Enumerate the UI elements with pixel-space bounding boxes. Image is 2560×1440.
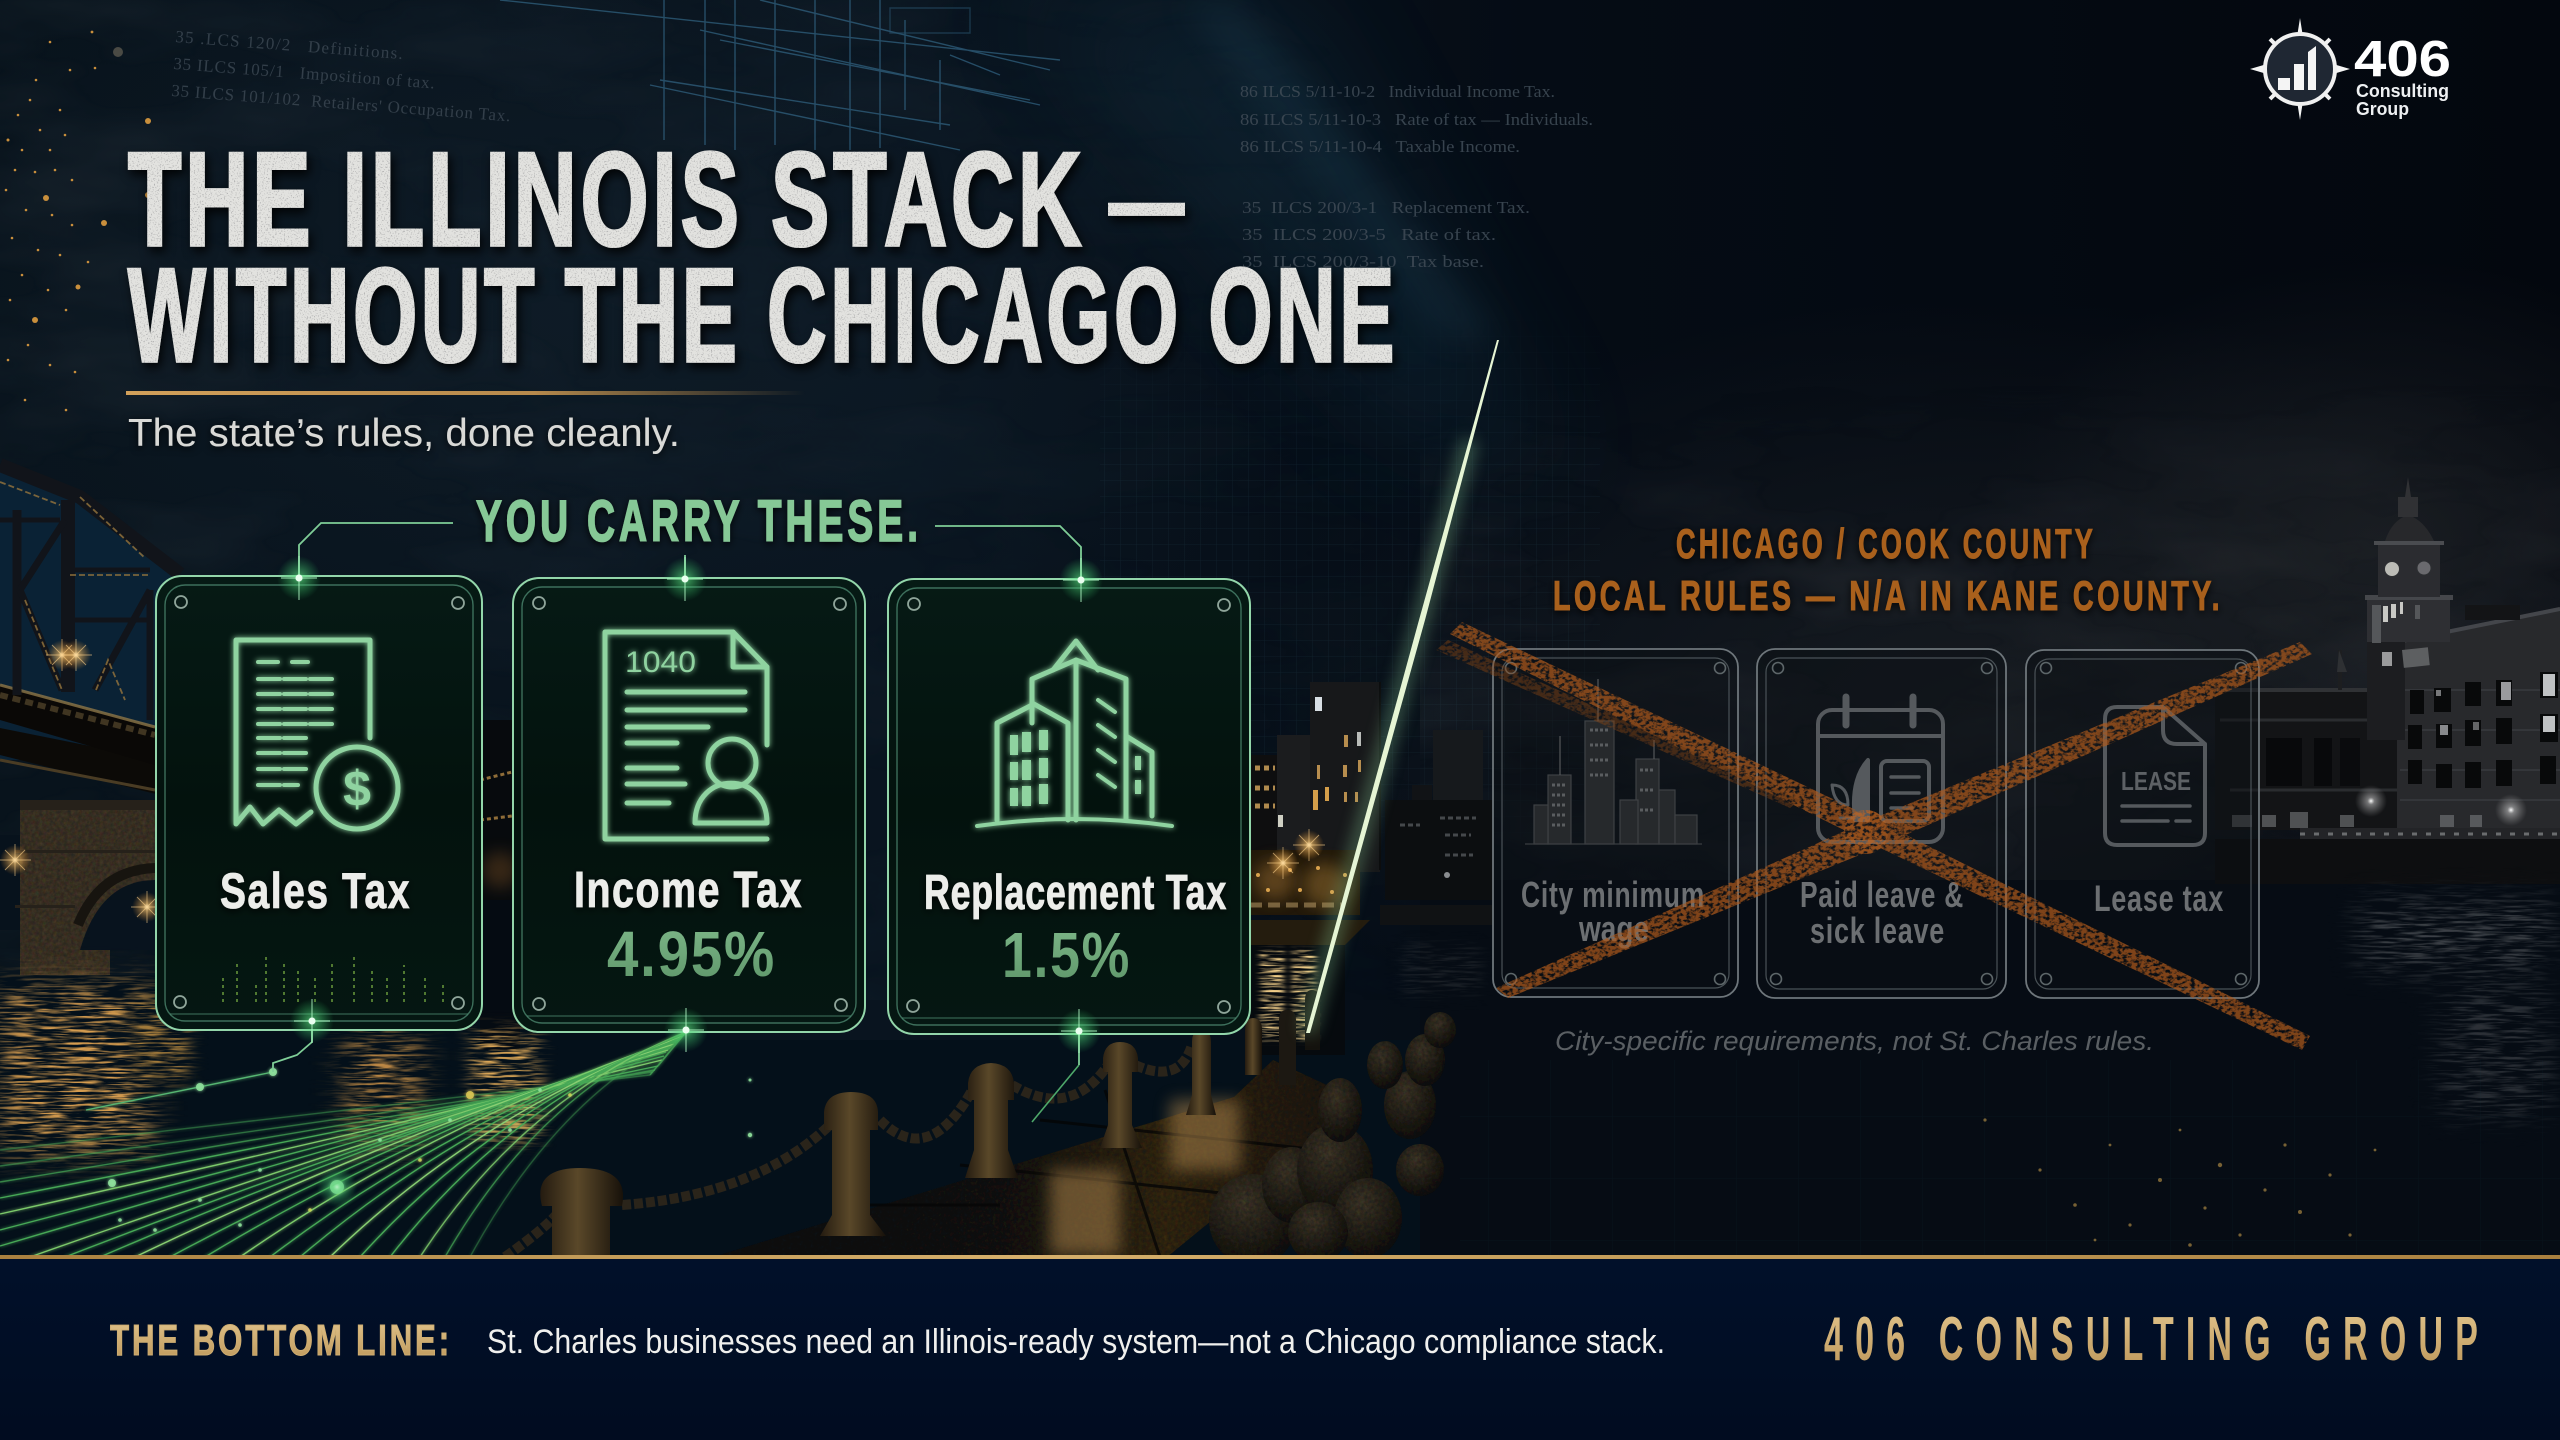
connector lines to green cards	[273, 523, 1081, 1072]
icon: compass with rising bars	[2250, 18, 2350, 120]
subtitle: The state’s rules, done cleanly.	[128, 412, 680, 455]
heading: chicago cook county local rules	[1553, 520, 2223, 619]
decoration: statute citations upper left: 35 ILCS 105/1 Imposition of tax.	[173, 54, 435, 93]
scene: dimmed skyline right of divider	[1380, 730, 1493, 925]
decoration: statute citations top centre: 86 ILCS 5/11-10-3 Rate of tax — Individuals.	[1240, 110, 1593, 129]
decoration: statute citations top centre: 35 ILCS 200/3-5 Rate of tax.	[1242, 225, 1496, 244]
label: city minimum wage: wage	[1578, 908, 1649, 949]
panel: replacement tax	[888, 579, 1250, 1034]
scene: green data streams on the water	[0, 1032, 752, 1257]
icon: lease document	[2105, 707, 2205, 845]
label: sales tax: Sales Tax	[220, 863, 411, 919]
label: income tax: Income Tax	[574, 861, 803, 918]
scene: steel truss bridge and stone pier	[0, 465, 180, 975]
background: night river scene	[0, 0, 2560, 1040]
scene: stone promenade with chain posts and rocks	[505, 990, 1456, 1266]
panel: lease tax	[2026, 650, 2259, 998]
decoration: statute citations top centre: 86 ILCS 5/11-10-4 Taxable Income.	[1240, 137, 1520, 156]
caption: city-specific requirements: City-specific requirements, not St. Charles rules.	[1555, 1026, 2154, 1056]
heading: chicago cook county local rules: CHICAGO / COOK COUNTY	[1676, 520, 2096, 567]
decoration: small bar spectrum	[223, 955, 443, 1002]
decoration: statute citations upper left: 35 ILCS 101/102 Retailers' Occupation Tax.	[171, 81, 511, 125]
heading: you carry these: YOU CARRY THESE.	[476, 489, 922, 554]
decoration: statute citations top centre: 86 ILCS 5/11-10-2 Individual Income Tax.	[1240, 82, 1555, 101]
scene: right water with grey reflections	[1400, 900, 2560, 1257]
icon: city skyline	[1525, 679, 1702, 844]
title: WITHOUT THE CHICAGO ONE	[128, 242, 1398, 390]
icon: 1040 form with person: 1040	[625, 646, 696, 679]
logo: 406 consulting group: Consulting	[2356, 81, 2449, 101]
decoration: gold particles	[5, 31, 151, 411]
icon: orange painted X over local rules	[1436, 622, 2312, 1050]
statement: bottom line message: St. Charles businesses need an Illinois-ready system—not a Chicago compliance stack.	[487, 1323, 1665, 1361]
icon: receipt with dollar coin: $	[343, 761, 371, 817]
glow nodes on card edges	[277, 556, 1103, 1053]
value: income tax rate: 4.95%	[607, 918, 776, 990]
icon: lease document: LEASE	[2121, 766, 2191, 796]
title	[128, 126, 1398, 390]
decoration: statute citations top centre: 35 ILCS 200/3-1 Replacement Tax.	[1242, 198, 1530, 217]
footer band	[0, 1255, 2560, 1440]
icon: calendar with leaf and document	[1818, 697, 1943, 842]
label: paid leave and sick leave: Paid leave &	[1800, 874, 1964, 915]
panel: sales tax	[156, 576, 482, 1030]
title: THE ILLINOIS STACK	[128, 126, 1085, 274]
icon: office buildings	[977, 641, 1172, 826]
title: —	[1108, 126, 1185, 274]
divider: glowing diagonal beam	[1306, 340, 1499, 1033]
logo: 406 consulting group: Group	[2356, 99, 2409, 119]
decoration: statute citations top centre	[1240, 82, 1593, 271]
label: paid leave and sick leave: sick leave	[1810, 910, 1945, 951]
label: lease tax: Lease tax	[2094, 878, 2224, 919]
scene: clock tower and courthouse building	[2215, 477, 2560, 884]
label: replacement tax: Replacement Tax	[924, 866, 1227, 920]
decoration: statute citations upper left: 35 .LCS 120/2 Definitions.	[175, 27, 403, 63]
logo: 406 consulting group: 406	[2354, 30, 2451, 87]
heading: chicago cook county local rules: LOCAL RULES — N/A IN KANE COUNTY.	[1553, 572, 2223, 619]
panel: paid leave and sick leave	[1757, 649, 2006, 998]
value: replacement tax rate: 1.5%	[1002, 919, 1131, 991]
label: paid leave and sick leave	[1800, 874, 1964, 951]
scene: left river with amber reflections	[0, 900, 1345, 1260]
decoration: statute citations upper left	[171, 27, 515, 125]
panel: income tax	[513, 578, 865, 1032]
label: city minimum wage	[1521, 874, 1705, 949]
label: the bottom line: THE BOTTOM LINE:	[110, 1316, 452, 1365]
decoration: statute citations top centre: 35 ILCS 200/3-10 Tax base.	[1242, 252, 1484, 271]
scene: warm city buildings beyond the cards	[480, 682, 1380, 945]
label: city minimum wage: City minimum	[1521, 874, 1705, 915]
decoration: top blueprint grid	[500, 0, 1060, 150]
logo: 406 consulting group	[2250, 18, 2451, 120]
icon: receipt with dollar coin	[236, 640, 398, 829]
gold rule under title	[126, 391, 806, 395]
icon: 1040 form with person	[605, 632, 767, 839]
panel: city minimum wage	[1493, 649, 1738, 997]
